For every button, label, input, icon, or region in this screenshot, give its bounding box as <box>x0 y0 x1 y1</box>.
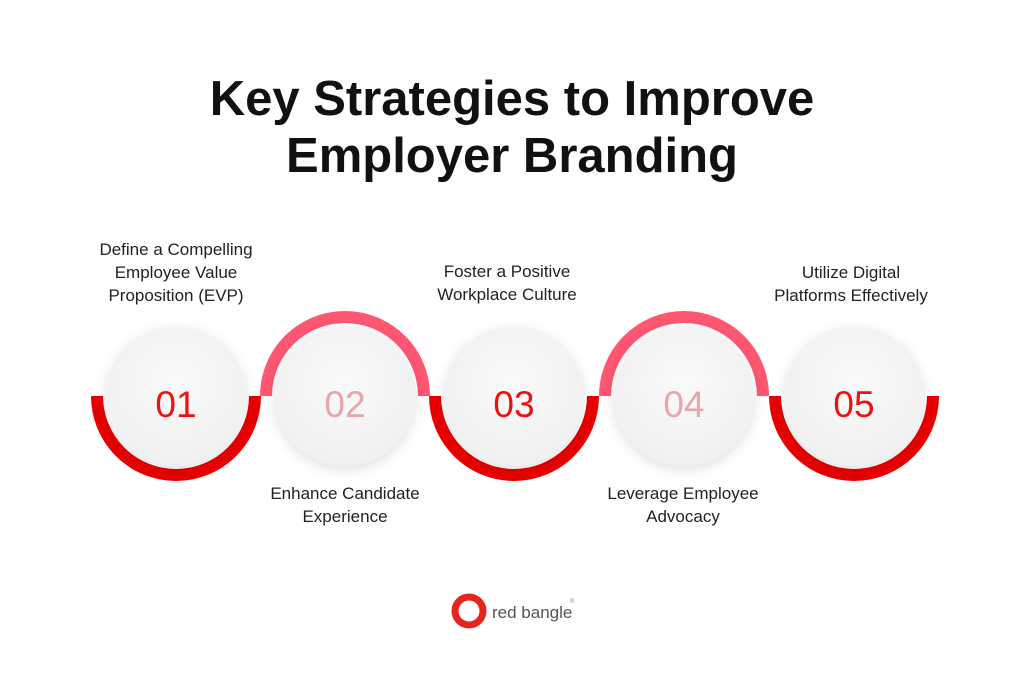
label 05: Utilize Digital <box>802 263 900 282</box>
label 01: Define a Compelling <box>99 240 253 259</box>
label 01: Proposition (EVP) <box>108 286 244 305</box>
label 04: Advocacy <box>646 507 720 526</box>
numbers: 01 <box>155 384 197 425</box>
logo <box>455 597 575 625</box>
arcs <box>97 317 933 475</box>
title: Employer Branding <box>286 129 738 183</box>
logo: ® <box>570 598 575 605</box>
label 02: Enhance Candidate <box>270 484 420 503</box>
title: Key Strategies to Improve <box>210 72 814 126</box>
label 02: Experience <box>302 507 388 526</box>
label 01 <box>99 240 253 305</box>
label 03: Workplace Culture <box>437 285 577 304</box>
logo: red bangle <box>492 603 572 622</box>
title <box>210 72 814 183</box>
label 05 <box>774 263 928 305</box>
label 01: Employee Value <box>115 263 237 282</box>
numbers: 03 <box>493 384 535 425</box>
label 04: Leverage Employee <box>607 484 759 503</box>
label 05: Platforms Effectively <box>774 286 928 305</box>
label 02 <box>270 484 420 526</box>
label 04 <box>607 484 759 526</box>
circles <box>106 326 924 466</box>
label 03 <box>437 262 577 304</box>
numbers: 05 <box>833 384 875 425</box>
numbers: 04 <box>663 384 705 425</box>
numbers <box>155 384 875 425</box>
numbers: 02 <box>324 384 366 425</box>
label 03: Foster a Positive <box>444 262 570 281</box>
